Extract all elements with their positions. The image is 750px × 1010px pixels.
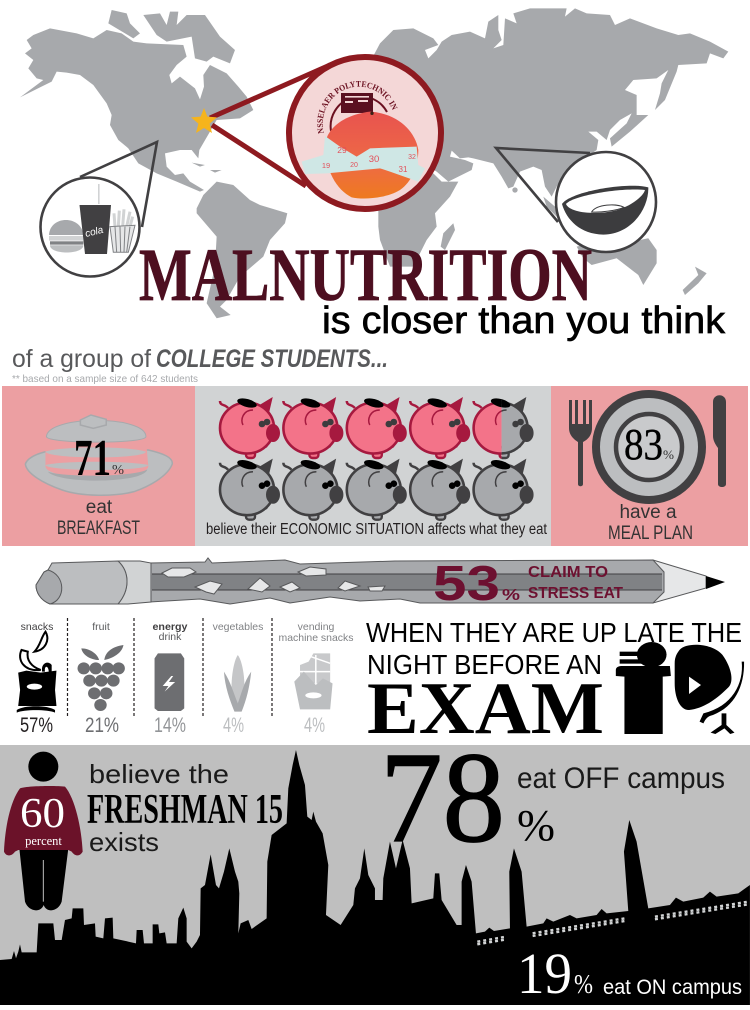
stat: 78% off campus	[380, 726, 725, 870]
map: Africa	[343, 173, 458, 267]
icon: plate	[596, 394, 702, 500]
map: Sumatra	[543, 197, 557, 217]
icon: student at desk	[616, 642, 744, 734]
apple with tape measure	[302, 112, 425, 198]
column: vegetables: vegetables	[213, 621, 263, 633]
stat: 60 percent: 60	[20, 791, 65, 837]
map: Caribbean	[192, 163, 222, 173]
column: energy drink	[152, 621, 188, 737]
world map	[20, 8, 728, 318]
stat text: freshman 15: exists	[89, 827, 159, 857]
stat: 71%: 71	[74, 430, 111, 487]
column: vegetables: 4%	[223, 714, 244, 737]
heading: up late before an exam: EXAM	[367, 668, 604, 750]
icon: chip bag	[17, 632, 56, 713]
column: vending machine snacks: machine snacks	[278, 632, 354, 644]
column: energy drink: energy	[152, 621, 188, 633]
panel: economic situation	[195, 386, 551, 546]
icon: cola cup: cola	[84, 225, 105, 240]
label: meal plan: have a	[619, 502, 677, 523]
stat: 78% off campus: 78	[380, 726, 505, 870]
icon: energy can	[155, 653, 184, 711]
icon: pancakes	[25, 415, 172, 495]
label: eat breakfast	[57, 497, 140, 539]
icon: chocolate bar	[294, 653, 333, 709]
map: Sri Lanka	[512, 187, 518, 193]
panel: breakfast	[2, 386, 195, 546]
stat: 83%: %	[663, 447, 674, 462]
subtitle: is closer than you think	[322, 300, 726, 342]
label: meal plan: MEAL PLAN	[608, 523, 693, 544]
stat: 19% on campus: 19	[517, 941, 572, 1006]
icon: person in sweater	[4, 752, 83, 910]
heading: up late before an exam: NIGHT BEFORE AN	[367, 649, 602, 680]
title: MALNUTRITION	[139, 234, 592, 317]
stat: 78% off campus: %	[517, 801, 555, 850]
stat: 53% claim to stress eat: %	[502, 587, 520, 604]
stat: 60 percent: percent	[25, 834, 62, 848]
callout: junk food lens	[40, 142, 157, 276]
icon: fork	[569, 400, 592, 486]
stat: 19% on campus: %	[574, 969, 593, 999]
icon: fries	[110, 209, 135, 252]
icon: bowl	[562, 186, 648, 235]
panel: campus skyline	[0, 726, 750, 1006]
stat: 53% claim to stress eat: STRESS EAT	[528, 585, 623, 602]
heading: up late before an exam	[366, 617, 742, 750]
map: Eurasia	[350, 8, 728, 197]
map: New Zealand	[683, 267, 707, 295]
column: energy drink: 14%	[154, 714, 186, 737]
map: Arctic islands	[108, 10, 235, 63]
stat: 19% on campus	[517, 941, 742, 1006]
apple with tape measure: 32	[408, 154, 416, 161]
panel: meal plan	[551, 386, 748, 546]
callout: empty bowl lens	[496, 148, 656, 252]
apple with tape measure: 20	[350, 162, 358, 169]
stat: 78% off campus: eat OFF campus	[517, 762, 725, 795]
map: North America	[20, 28, 253, 192]
column: fruit	[78, 621, 125, 737]
sample size note: ** based on a sample size of 642 students	[12, 373, 198, 385]
pencil illustration	[36, 557, 725, 611]
stat text: freshman 15: FRESHMAN 15	[87, 787, 283, 833]
intro heading: COLLEGE STUDENTS...	[156, 345, 388, 373]
apple with tape measure: 29	[337, 145, 347, 155]
intro heading	[12, 345, 388, 373]
map: Australia	[577, 238, 657, 285]
stat text: freshman 15	[87, 759, 283, 857]
skyline lattice	[477, 902, 748, 944]
seal: Rensselaer Polytechnic Institute	[317, 81, 398, 134]
icon: knife	[713, 395, 726, 487]
stat: 83%: 83	[624, 420, 663, 469]
stat text: freshman 15: believe the	[89, 759, 229, 789]
column: fruit: fruit	[92, 621, 110, 633]
column: snacks: snacks	[21, 621, 53, 633]
column: snacks: 57%	[20, 714, 53, 737]
column: vending machine snacks: 4%	[304, 714, 325, 737]
label: meal plan	[608, 502, 693, 544]
map: Americas	[20, 10, 287, 318]
icon: location star	[191, 108, 217, 133]
stat: 19% on campus: eat ON campus	[603, 976, 742, 999]
icon: grapes	[78, 645, 125, 711]
intro heading: of a group of	[12, 345, 151, 373]
column: snacks	[17, 621, 56, 737]
stat: 53% claim to stress eat: 53	[433, 557, 500, 611]
chart: grey pigs row	[220, 458, 534, 520]
column: vegetables	[213, 621, 263, 737]
column: vending machine snacks	[278, 621, 354, 737]
label: eat breakfast: BREAKFAST	[57, 518, 140, 539]
apple with tape measure: 31	[399, 165, 408, 174]
pencil tears	[162, 567, 385, 594]
apple with tape measure: 19	[322, 161, 330, 170]
column: vending machine snacks: vending	[298, 621, 335, 633]
icon: burger	[49, 220, 83, 253]
apple with tape measure: 30	[369, 154, 379, 165]
column: fruit: 21%	[85, 714, 119, 737]
map: Old World	[343, 8, 728, 295]
stat: 71%: %	[112, 463, 124, 478]
column: energy drink: drink	[159, 631, 182, 643]
map: Madagascar	[441, 223, 455, 250]
label: economic situation: believe their ECONOMIC SITUATION affects what they eat	[206, 521, 548, 538]
icon: corn	[224, 655, 251, 712]
map: South America	[197, 182, 287, 318]
label: eat breakfast: eat	[86, 497, 113, 518]
callout: college lens with apple	[209, 54, 444, 212]
stat: 53% claim to stress eat	[433, 557, 623, 611]
skyline silhouette	[0, 750, 750, 1005]
chart: pink pigs row	[220, 397, 534, 458]
stat: 53% claim to stress eat: CLAIM TO	[528, 564, 608, 581]
